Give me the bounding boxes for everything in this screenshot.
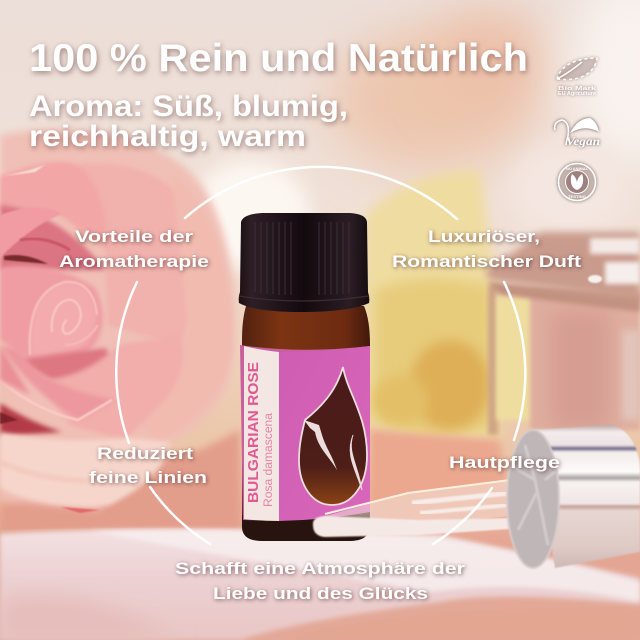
amber glass body xyxy=(242,306,370,541)
label: Luxuriöser, Romantischer Duft: Romantischer Duft xyxy=(392,253,582,271)
icon: drop xyxy=(299,367,367,505)
central bud xyxy=(0,266,103,360)
yellow glass reflection xyxy=(365,170,500,440)
black screw cap xyxy=(239,213,369,312)
icon: no animal testing seal: TESTING xyxy=(568,194,586,199)
outer soft bloom xyxy=(0,130,235,510)
pale glass jar xyxy=(488,285,498,435)
subtitle: aroma xyxy=(29,90,348,153)
latin name: Rosa damascena xyxy=(263,412,275,507)
bottle xyxy=(239,213,370,541)
label: Hautpflege: Hautpflege xyxy=(449,454,560,472)
subtitle: aroma: reichhaltig, warm xyxy=(29,120,306,153)
icon: EU organic leaf: EU Agriculture xyxy=(558,91,596,97)
silver cap xyxy=(507,425,640,568)
label: Vorteile der Aromatherapie: Aromatherapie xyxy=(59,253,209,271)
icon: vegan: Vegan xyxy=(566,134,600,148)
circular connector arcs xyxy=(116,167,525,544)
label: Luxuriöser, Romantischer Duft xyxy=(392,228,582,271)
label: Luxuriöser, Romantischer Duft: Luxuriöser, xyxy=(428,228,540,246)
label xyxy=(240,345,370,521)
upper petal xyxy=(0,162,108,250)
shadow under bud xyxy=(15,348,122,386)
icon: vegan xyxy=(555,118,600,148)
rose flower xyxy=(0,130,235,513)
label: Reduziert feine Linien: feine Linien xyxy=(89,469,207,487)
icon: EU organic leaf xyxy=(557,58,598,97)
product name: BULGARIAN ROSE xyxy=(245,362,262,503)
dropper xyxy=(313,425,640,568)
title: 100 % Rein und Natürlich xyxy=(29,37,528,80)
pale lower petals xyxy=(0,432,170,507)
deep red gap xyxy=(0,403,62,436)
icon: no animal testing seal xyxy=(558,164,596,200)
icon: EU organic leaf: Bio Mark xyxy=(558,86,598,92)
glass pipette xyxy=(313,480,510,537)
label: Reduziert feine Linien xyxy=(89,445,207,487)
cloth surface xyxy=(0,528,640,640)
peach table behind xyxy=(0,430,240,540)
icon: no animal testing seal: NO ANIMAL xyxy=(566,166,589,171)
label: Schafft eine Atmosphäre der Liebe und des Glücks xyxy=(175,560,466,603)
label: Reduziert feine Linien: Reduziert xyxy=(97,445,194,463)
label: Vorteile der Aromatherapie xyxy=(59,228,209,271)
label: Schafft eine Atmosphäre der Liebe und des Glücks: Schafft eine Atmosphäre der xyxy=(175,560,466,578)
subtitle: aroma: Aroma: Süß, blumig, xyxy=(29,90,348,123)
label: Vorteile der Aromatherapie: Vorteile der xyxy=(75,228,194,246)
label: Schafft eine Atmosphäre der Liebe und des Glücks: Liebe und des Glücks xyxy=(213,585,428,603)
lower wrapping petal xyxy=(40,335,183,440)
inner dark fold xyxy=(0,205,105,270)
